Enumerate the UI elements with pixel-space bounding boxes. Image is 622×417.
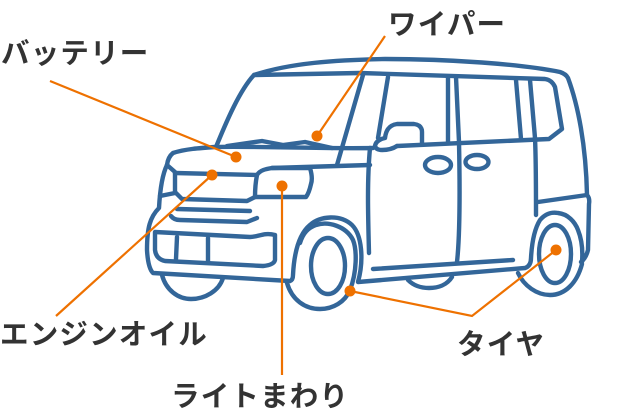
- label: lights and surroundings: ライトまわり: [171, 381, 349, 413]
- grille: [175, 173, 257, 201]
- hood and cowl: [167, 147, 373, 165]
- wiper zigzag: [227, 141, 332, 148]
- label: engine oil: エンジンオイル: [0, 319, 208, 351]
- car illustration: [147, 59, 589, 309]
- bumper: [155, 232, 275, 266]
- roof and rear body: [216, 59, 589, 262]
- label: wiper: ワイパー: [388, 9, 506, 41]
- window top line: [254, 73, 562, 146]
- rear tyre: [518, 264, 582, 295]
- door seams: [368, 148, 370, 253]
- leader: wiper: [312, 36, 385, 142]
- label: battery: バッテリー: [1, 38, 150, 70]
- door handles: [425, 157, 451, 173]
- door pillars: [448, 77, 459, 142]
- front pillars: [337, 75, 363, 165]
- leader: tyres: [344, 244, 562, 316]
- beltline: [272, 165, 370, 168]
- rear left tyre: [408, 277, 452, 288]
- front left tyre: [162, 275, 223, 299]
- left side light panel: [160, 165, 175, 196]
- left body side and lower edge: [147, 165, 582, 282]
- front tyre: [287, 224, 356, 309]
- leader: lights: [276, 180, 288, 375]
- side mirror: [375, 124, 422, 150]
- headlight: [255, 168, 312, 197]
- leader: engine oil: [56, 170, 218, 316]
- leader: battery: [50, 81, 242, 162]
- label: tyres: タイヤ: [457, 329, 545, 361]
- rear window lower line: [538, 195, 587, 202]
- rocker: [373, 260, 513, 269]
